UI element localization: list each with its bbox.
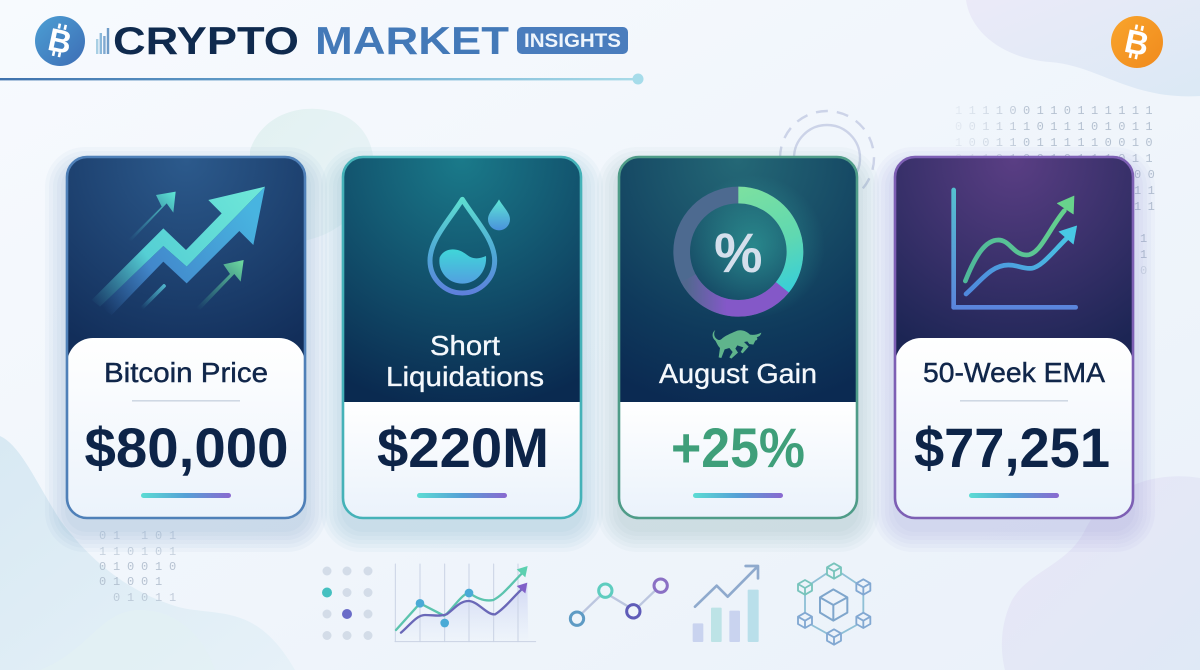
title (113, 20, 509, 63)
binary pattern top right (955, 104, 1161, 278)
label: august gain: August Gain (659, 358, 817, 389)
binary pattern top right: 1 (1140, 248, 1154, 262)
binary pattern top right: 1 (1140, 232, 1154, 246)
icon: blockchain network (798, 563, 870, 645)
icon: connected nodes (570, 579, 667, 625)
label: bitcoin price: Bitcoin Price (104, 357, 268, 388)
binary pattern bottom left: 110101 (99, 545, 183, 559)
binary pattern bottom left: 010010 (99, 560, 183, 574)
dashed circle decoration (780, 111, 874, 205)
dot grid (322, 566, 372, 640)
label: short liquidations: Liquidations (386, 361, 544, 392)
label: 50-week ema: 50-Week EMA (923, 357, 1105, 388)
binary pattern top right: 100110111110010 (955, 136, 1159, 150)
label: short liquidations: Short (430, 330, 500, 361)
panel: short liquidations card (321, 147, 603, 552)
chart: bottom line chart (395, 564, 536, 642)
badge: insights (517, 27, 628, 54)
binary pattern bottom left: 01001 (99, 575, 169, 589)
icon: bar chart with arrow (693, 566, 759, 642)
title: MARKET (315, 20, 509, 63)
panel: august gain card (597, 147, 879, 552)
badge: insights: INSIGHTS (524, 31, 621, 52)
binary pattern bottom left (99, 529, 183, 605)
header logo: small bars (96, 28, 109, 54)
icon: liquidity drops (430, 199, 510, 293)
binary pattern top right: 11 (1134, 200, 1161, 214)
value: $220M: $220M (377, 416, 549, 479)
icon: orange bitcoin coin (1111, 16, 1163, 68)
chart: ema lines (954, 190, 1077, 307)
binary pattern top right: 011010010111011 (955, 152, 1159, 166)
header logo: bitcoin badge (35, 16, 85, 66)
icon: bull (713, 330, 761, 359)
panel: bitcoin price card (45, 147, 327, 552)
icon: orange bitcoin coin: B (1121, 22, 1152, 63)
title: CRYPTO (113, 20, 299, 63)
chart: percent donut: % (714, 221, 762, 284)
icon: rising arrows (92, 187, 265, 315)
binary pattern top right: 111100110111111 (955, 104, 1159, 118)
value: $80,000: $80,000 (84, 416, 288, 479)
binary pattern top right: 001111011101011 (955, 120, 1159, 134)
value: $77,251: $77,251 (914, 416, 1110, 479)
panel: 50-week ema card (873, 147, 1155, 552)
binary pattern bottom left: 101 (141, 529, 183, 543)
binary pattern top right: 00 (1134, 168, 1161, 182)
header logo: bitcoin badge: B (45, 21, 75, 61)
header rule (0, 74, 644, 84)
label: short liquidations (386, 330, 544, 392)
chart: percent donut (682, 175, 825, 318)
binary pattern bottom left: 01 (99, 529, 127, 543)
value: +25%: +25% (671, 416, 805, 479)
binary pattern top right: 0 (1140, 264, 1154, 278)
binary pattern top right: 11 (1134, 184, 1161, 198)
binary pattern bottom left: 01011 (113, 591, 183, 605)
